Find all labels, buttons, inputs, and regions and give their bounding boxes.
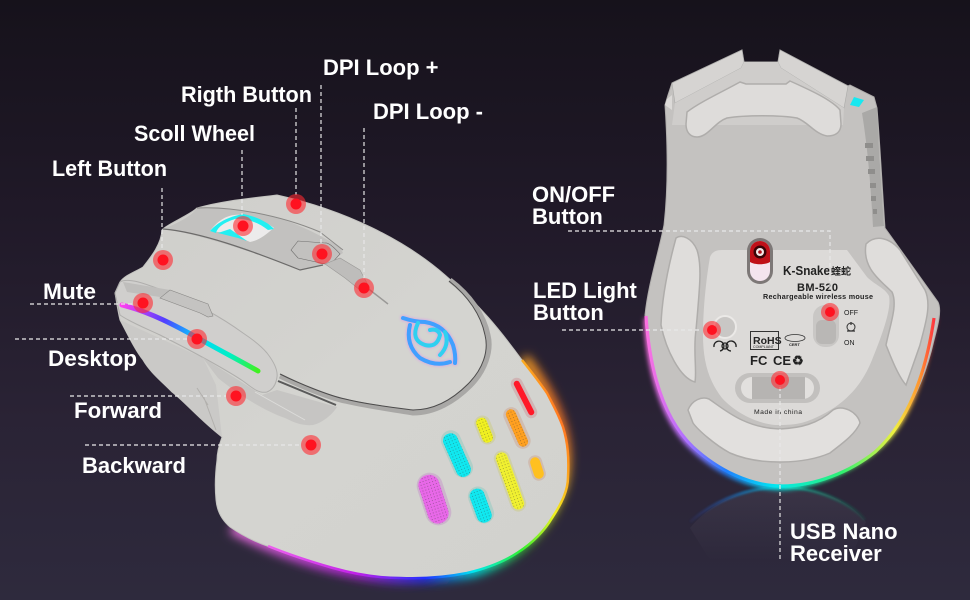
label: USB Nano Receiver: Receiver — [790, 541, 882, 566]
right mouse base — [645, 50, 940, 487]
right mouse: underside view — [645, 50, 940, 487]
label: Left Button: Left Button — [52, 156, 167, 181]
USB receiver slot — [735, 373, 820, 403]
forward backward thumb buttons — [202, 357, 337, 425]
label: ON/OFF Button: Button — [532, 204, 603, 229]
label: ON/OFF Button: ON/OFF — [532, 182, 615, 207]
brand and model text: ON — [844, 340, 854, 347]
RGB glow under right mouse — [647, 318, 934, 487]
logo: blue swirl — [403, 318, 455, 364]
OFF ON slide switch — [813, 305, 855, 347]
mute desktop button pair — [123, 282, 213, 317]
certification marks: FC — [750, 353, 768, 368]
top button seam and wheel housing — [163, 208, 388, 304]
LED button — [714, 316, 736, 351]
RGB glow under left mouse — [232, 358, 565, 578]
certification marks: CERT — [789, 342, 800, 347]
side ridge strip — [862, 107, 884, 227]
vent holes — [413, 376, 548, 529]
label: LED Light Button: LED Light — [533, 278, 638, 303]
top glide pad — [686, 81, 841, 137]
reflection under right mouse — [690, 487, 866, 560]
brand and model text: BM-520 — [797, 282, 838, 294]
brand and model text — [754, 263, 873, 416]
certification marks: CE — [773, 353, 791, 368]
brand and model text: K-Snake — [783, 263, 830, 278]
palm shell ring — [280, 280, 489, 413]
label: Forward: Forward — [74, 398, 162, 423]
label: USB Nano Receiver: USB Nano — [790, 519, 898, 544]
bottom glide pad — [688, 398, 860, 462]
right glide pad — [865, 238, 928, 385]
RGB bottom rim — [268, 360, 568, 578]
certification marks: COMPLIANT — [753, 345, 775, 349]
certification marks: ♻ — [792, 353, 804, 368]
label: DPI Loop -: DPI Loop - — [373, 99, 483, 124]
brand and model text: OFF — [844, 310, 858, 317]
label: Desktop: Desktop — [48, 346, 137, 371]
label: Backward: Backward — [82, 453, 186, 478]
side button arm with RGB strip — [115, 280, 277, 392]
certification marks: RoHS — [753, 335, 782, 347]
label: Scoll Wheel: Scoll Wheel — [134, 121, 255, 146]
top wing panels — [672, 50, 744, 103]
left mouse: top view — [115, 195, 568, 578]
cyan sensor window — [850, 97, 864, 107]
scroll wheel — [210, 215, 274, 242]
label: Rigth Button: Rigth Button — [181, 82, 312, 107]
callout markers — [133, 194, 839, 455]
leader lines — [15, 85, 830, 560]
left mouse body — [115, 195, 568, 578]
power switch with red eye — [747, 238, 773, 284]
label: Mute: Mute — [43, 279, 96, 304]
label: DPI Loop +: DPI Loop + — [323, 55, 438, 80]
left glide pad — [661, 236, 700, 382]
certification marks — [750, 332, 805, 368]
side ridged panel — [120, 320, 222, 437]
brand and model text: Rechargeable wireless mouse — [763, 292, 873, 301]
brand and model text: 蝰蛇 — [831, 265, 851, 278]
RGB rim — [646, 316, 934, 486]
DPI plus and minus buttons — [291, 241, 340, 265]
label: LED Light Button: Button — [533, 300, 604, 325]
brand and model text: Made in china — [754, 409, 802, 416]
central label plate — [703, 250, 889, 425]
